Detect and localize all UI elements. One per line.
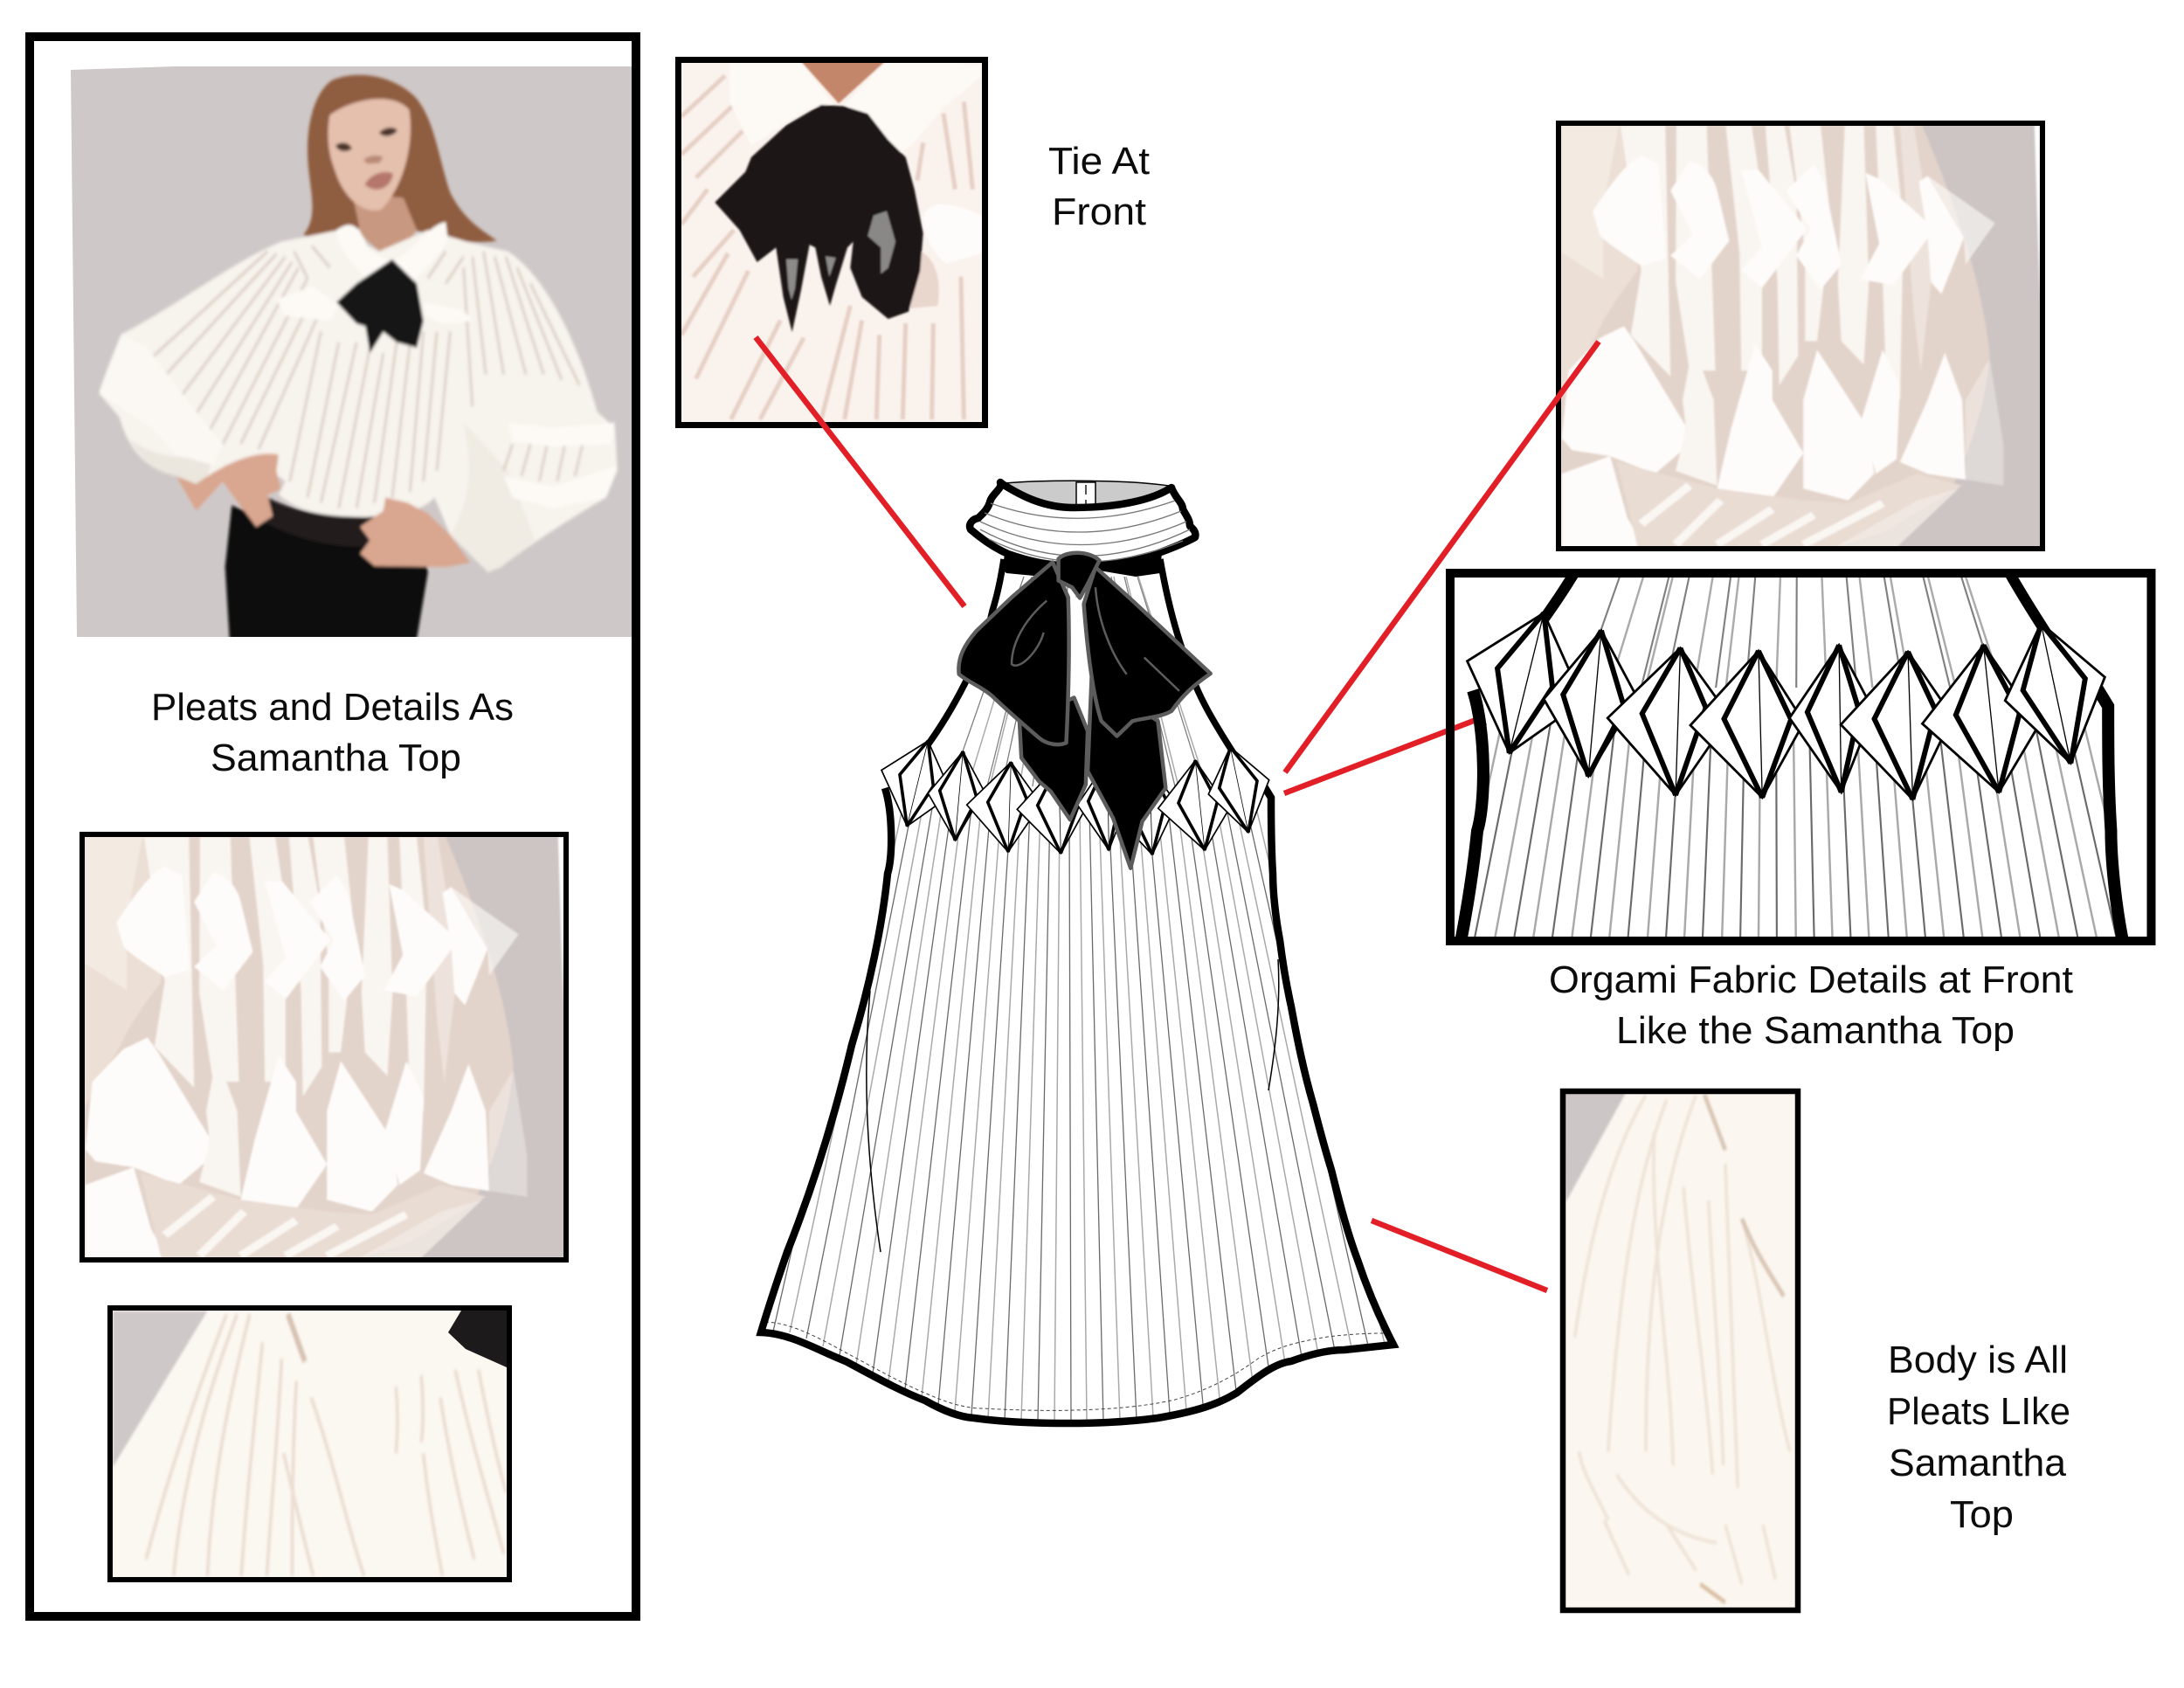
waistband (264, 496, 376, 549)
inset: origami fabric detail (1282, 569, 2156, 945)
caption: tie at front: Tie At (1048, 140, 1150, 183)
caption: body is all pleats (1887, 1339, 2070, 1536)
photo: body pleats close-up (1562, 1090, 1798, 1610)
ruffle image frame (82, 834, 566, 1260)
neck (353, 195, 418, 252)
face (328, 99, 411, 211)
inset frame (1450, 573, 2151, 941)
photo: shoulder pleats close-up (110, 1308, 509, 1580)
black neck band (1003, 552, 1162, 578)
bow (336, 259, 424, 353)
photo: origami ruffles (1559, 123, 2042, 549)
caption: body is all pleats: Pleats LIke (1887, 1390, 2070, 1433)
caption: origami fabric details (1549, 958, 2073, 1052)
collar (336, 222, 448, 280)
photo: tie detail (678, 59, 985, 425)
caption: body is all pleats: Top (1950, 1493, 2014, 1536)
tie image frame (678, 59, 985, 425)
red pointer: pleated ruffle photo to dress (1285, 342, 1599, 772)
shoulder pleats image (113, 1311, 507, 1577)
dress body with pleats and origami band (761, 559, 1393, 1423)
ruffle image (82, 834, 565, 1259)
blouse (99, 230, 618, 572)
panel: inspiration column (30, 37, 636, 1616)
black bow corner (448, 1311, 507, 1367)
body pleats image (1562, 1090, 1795, 1608)
inset background (1455, 578, 2147, 937)
caption: pleats and details (151, 686, 514, 779)
photo: model in pleated blouse (71, 66, 632, 640)
caption: body is all pleats: Samantha (1889, 1442, 2067, 1484)
red pointer: origami inset to dress (1284, 715, 1489, 793)
red pointer: tie detail to dress neck (756, 337, 964, 606)
caption: pleats and details: Pleats and Details As (151, 686, 514, 729)
caption: origami fabric details: Orgami Fabric Details at Front (1549, 958, 2073, 1001)
panel frame (30, 37, 636, 1616)
trousers (225, 506, 428, 640)
caption: pleats and details: Samantha Top (211, 737, 461, 779)
caption: body is all pleats: Body is All (1888, 1339, 2068, 1381)
red pointer: body pleats photo to dress (1372, 1221, 1547, 1290)
shoulder pleats frame (110, 1308, 509, 1580)
ruffles image frame (1559, 123, 2042, 549)
pleated collar (970, 482, 1195, 566)
caption: tie at front (1048, 140, 1150, 233)
technical flat: pleated halter dress (761, 481, 1393, 1423)
body pleats frame (1563, 1091, 1798, 1610)
ruffles image (1559, 123, 2042, 548)
hands (176, 453, 280, 527)
tie image (681, 61, 982, 422)
photo: origami ruffle close-up (82, 834, 566, 1260)
caption: tie at front: Front (1052, 190, 1146, 233)
caption: origami fabric details: Like the Samantha Top (1616, 1009, 2015, 1052)
hair behind (303, 75, 497, 242)
enlarged dress view (1455, 578, 2128, 937)
pussy bow tie (958, 553, 1211, 868)
sleeve ruffles (132, 355, 215, 465)
neck back (1005, 481, 1169, 508)
